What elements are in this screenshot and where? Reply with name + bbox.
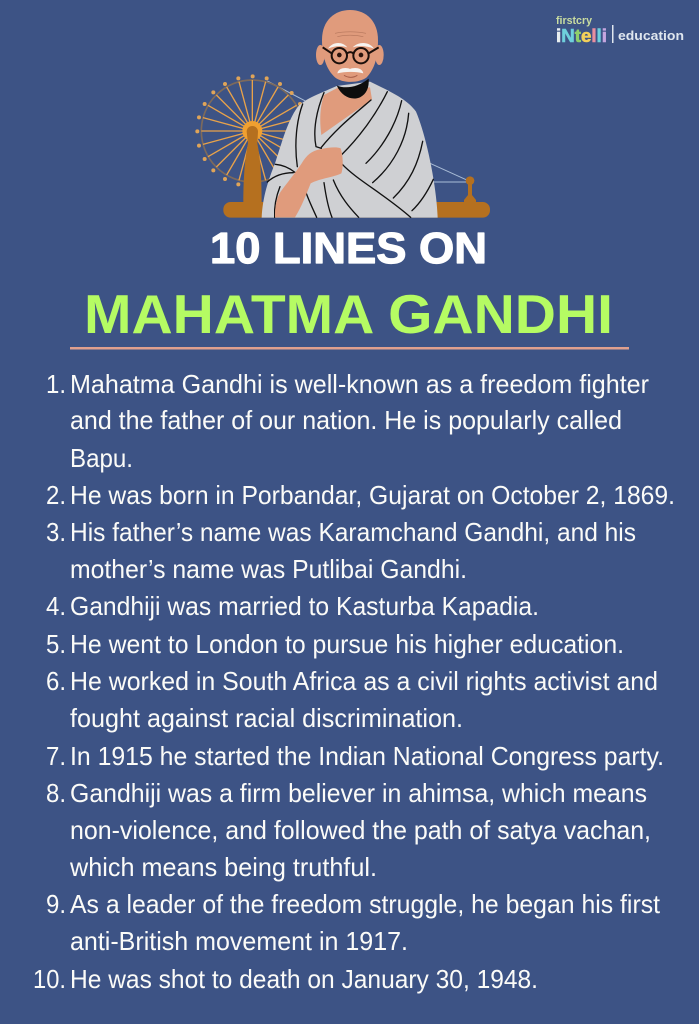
item 1 xyxy=(46,369,649,473)
item 3: 3. xyxy=(46,517,66,547)
item 3: mother’s name was Putlibai Gandhi. xyxy=(70,554,467,584)
item 6: He worked in South Africa as a civil rights activist and xyxy=(70,666,658,696)
logo: firstcry intelli education: education xyxy=(618,29,684,43)
illustration: Gandhi at spinning wheel xyxy=(195,10,490,218)
logo: firstcry intelli education: firstcry xyxy=(556,15,593,27)
item 3 xyxy=(46,517,636,584)
item 5: 5. xyxy=(46,629,66,659)
item 10: He was shot to death on January 30, 1948. xyxy=(70,964,538,994)
item 6: 6. xyxy=(46,666,66,696)
item 1: 1. xyxy=(46,369,66,399)
logo: firstcry intelli education: iNtelli xyxy=(556,26,607,46)
item 1: Bapu. xyxy=(70,443,133,473)
item 8: non-violence, and followed the path of satya vachan, xyxy=(70,815,651,845)
item 9: 9. xyxy=(46,889,66,919)
divider under title xyxy=(70,347,629,350)
item 3: His father’s name was Karamchand Gandhi, and his xyxy=(70,517,636,547)
item 9 xyxy=(46,889,661,956)
numbered list of facts xyxy=(33,369,675,994)
item 8: which means being truthful. xyxy=(69,852,377,882)
icon: spinning wheel xyxy=(195,74,490,218)
figure: robe xyxy=(262,79,438,218)
title: Mahatma Gandhi: MAHATMA GANDHI xyxy=(84,283,613,345)
figure: arm and fist xyxy=(275,147,343,217)
item 1: and the father of our nation. He is popularly called xyxy=(70,405,622,435)
item 7: In 1915 he started the Indian National Congress party. xyxy=(70,741,664,771)
title: 10 lines on: 10 LINES ON xyxy=(210,224,487,273)
item 6 xyxy=(46,666,658,733)
item 2: He was born in Porbandar, Gujarat on October 2, 1869. xyxy=(70,480,675,510)
item 8: 8. xyxy=(46,778,66,808)
item 6: fought against racial discrimination. xyxy=(70,703,463,733)
logo: firstcry intelli education xyxy=(556,15,684,46)
item 8 xyxy=(46,778,651,882)
item 9: As a leader of the freedom struggle, he began his first xyxy=(70,889,661,919)
item 9: anti-British movement in 1917. xyxy=(70,926,408,956)
item 4: 4. xyxy=(46,591,66,621)
item 4: Gandhiji was married to Kasturba Kapadia. xyxy=(70,591,539,621)
figure: head xyxy=(316,10,384,82)
item 10: 10. xyxy=(33,964,66,994)
item 8: Gandhiji was a firm believer in ahimsa, which means xyxy=(70,778,647,808)
item 7: 7. xyxy=(46,741,66,771)
item 5: He went to London to pursue his higher education. xyxy=(70,629,624,659)
item 1: Mahatma Gandhi is well-known as a freedom fighter xyxy=(70,369,649,399)
item 2: 2. xyxy=(46,480,66,510)
